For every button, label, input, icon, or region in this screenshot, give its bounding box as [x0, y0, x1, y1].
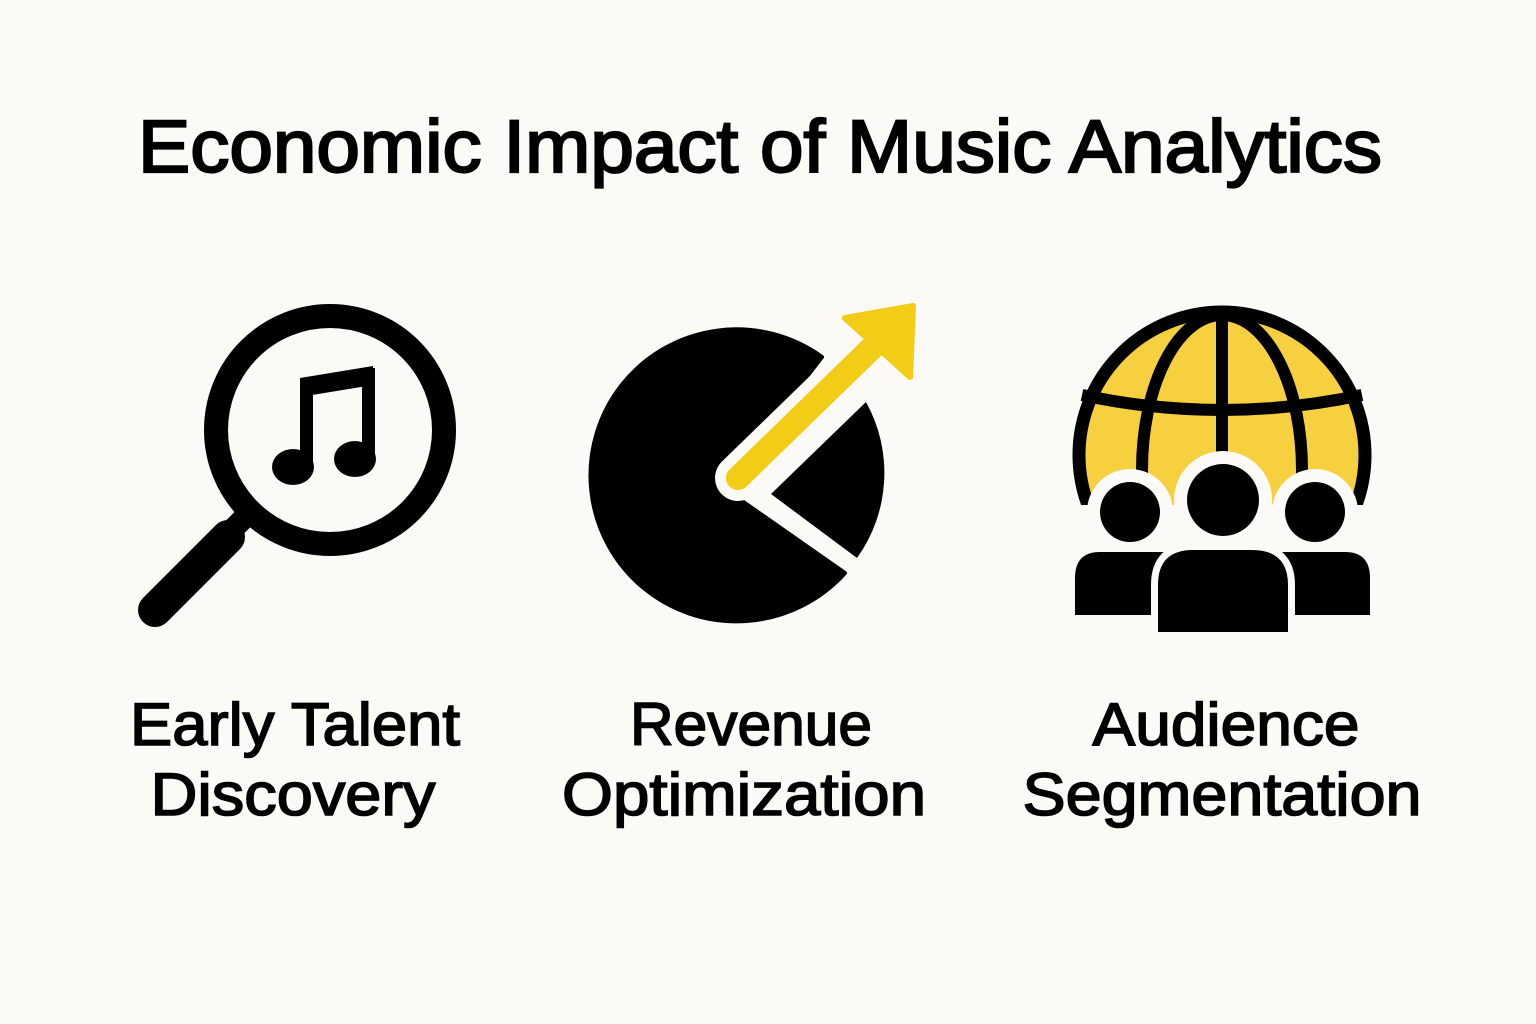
icon: magnifier with music note	[155, 316, 444, 610]
icon: pie chart with rising arrow	[590, 306, 913, 621]
title: Economic Impact of Music Analytics	[138, 105, 1382, 188]
label: early talent discovery	[130, 691, 460, 828]
label: revenue optimization: Optimization	[562, 761, 926, 828]
label: early talent discovery: Discovery	[150, 761, 436, 828]
icon: globe with audience	[1075, 312, 1370, 632]
label: revenue optimization	[562, 691, 926, 828]
people	[1075, 476, 1370, 615]
label: audience segmentation: Segmentation	[1022, 761, 1422, 828]
label: early talent discovery: Early Talent	[130, 691, 460, 758]
label: audience segmentation: Audience	[1092, 691, 1360, 758]
icon: music note	[272, 366, 376, 485]
label: audience segmentation	[1022, 691, 1422, 828]
label: revenue optimization: Revenue	[630, 691, 872, 758]
